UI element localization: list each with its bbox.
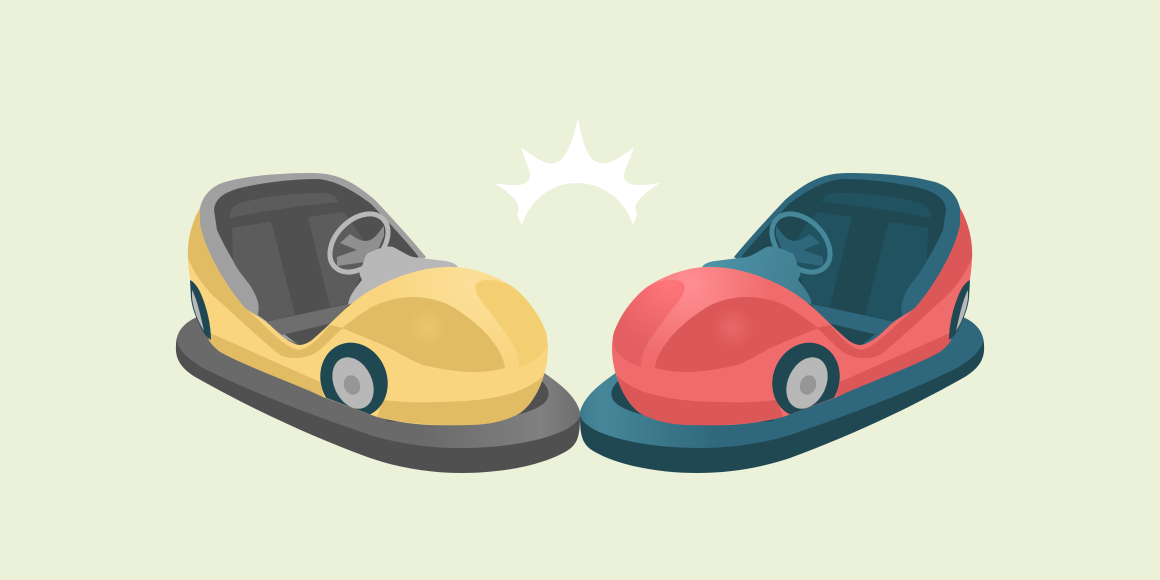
red car: rear wheel [949, 280, 970, 340]
yellow car: left seat [232, 222, 295, 321]
red car: headrest strip [822, 193, 930, 218]
red car: body [612, 208, 972, 425]
hub centre [344, 375, 360, 395]
steering spokes [776, 226, 823, 266]
red car: lower front shade [617, 375, 783, 425]
red car: steering column [702, 247, 812, 305]
steering ring [761, 203, 841, 283]
red car: cockpit interior [730, 179, 946, 346]
yellow car: base skirt [176, 318, 580, 473]
yellow car: shade under rim [188, 208, 343, 358]
steering spokes [337, 226, 384, 266]
yellow car: front fender [475, 280, 547, 367]
red car: shade under rim [817, 208, 972, 358]
yellow bumper car [176, 173, 580, 473]
red car: base skirt [580, 318, 984, 473]
red car: right seat [790, 212, 852, 307]
hub centre [800, 375, 816, 395]
red car: side shade [836, 333, 950, 397]
red car: hood panel [655, 297, 818, 372]
red car: steering wheel [761, 203, 841, 283]
yellow car: side shade [210, 333, 324, 397]
yellow car: right seat [308, 212, 370, 307]
yellow car: base well shadow [385, 372, 549, 423]
red car: front fender [613, 280, 685, 367]
red bumper car (mirrored) [580, 173, 984, 473]
illustration: two colliding bumper cars [176, 118, 984, 473]
red car: left seat [865, 222, 928, 321]
tyre [772, 342, 840, 414]
rear tyre [190, 280, 211, 340]
rear tyre [949, 280, 970, 340]
yellow car: cockpit rim [190, 173, 426, 345]
yellow car: body [188, 208, 548, 425]
red car: front wheel [772, 342, 840, 414]
red car: cockpit rim [734, 173, 970, 345]
yellow car: rear seat bar [265, 304, 348, 335]
red car: rear seat bar [812, 304, 895, 335]
yellow car: lower front shade [377, 375, 543, 425]
yellow car: front wheel [320, 342, 388, 414]
rear hubcap [956, 290, 968, 331]
tyre [320, 342, 388, 414]
hubcap [786, 357, 828, 409]
red car: base top [580, 310, 983, 448]
yellow car: steering column [348, 247, 458, 305]
yellow car: rear wheel [190, 280, 211, 340]
yellow car: hood panel [342, 297, 505, 372]
impact burst [494, 118, 660, 225]
yellow car: cockpit interior [214, 179, 430, 346]
hubcap [332, 357, 374, 409]
rear hubcap [192, 290, 204, 331]
yellow car: headrest strip [230, 193, 338, 218]
yellow car: steering wheel [319, 203, 399, 283]
steering ring [319, 203, 399, 283]
red car: base well shadow [611, 372, 775, 423]
yellow car: base top [177, 310, 580, 448]
